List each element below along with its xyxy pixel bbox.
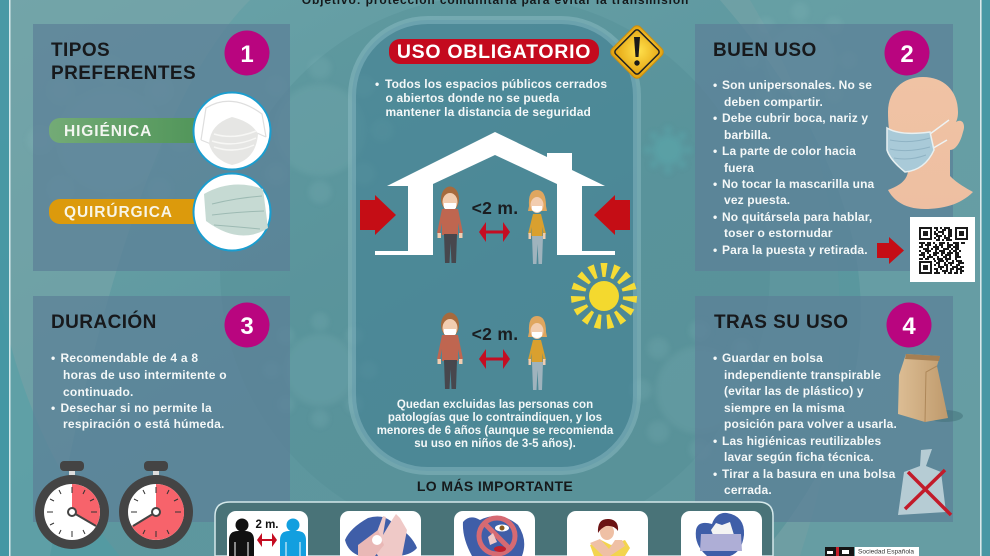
- text: after use: independiente transpirable: [724, 368, 881, 382]
- text: good use: •: [713, 144, 717, 158]
- text: good use: •: [713, 243, 717, 257]
- icon: house: [375, 132, 615, 255]
- text: good use: •: [713, 210, 717, 224]
- arrow: left: [360, 195, 396, 235]
- text: after use: Tirar a la basura en una bolsa: [722, 467, 896, 481]
- person: man indoors: [437, 186, 463, 263]
- icon: head with mask: [887, 77, 973, 209]
- text: good use: deben compartir.: [724, 95, 823, 109]
- icon: warning sign: [609, 24, 665, 80]
- panel: buen uso: [695, 24, 953, 271]
- card: distance: 2 m.: [255, 519, 279, 531]
- heading: tipos preferentes: PREFERENTES: [51, 63, 196, 84]
- text: after use: •: [713, 467, 717, 481]
- distance indoors: <2 m.: [472, 198, 518, 218]
- text: good use: No tocar la mascarilla una: [722, 177, 875, 191]
- label: higiénica: HIGIÉNICA: [64, 123, 152, 140]
- text: after use: posición para volver a usarla.: [724, 417, 897, 431]
- badge 1: [224, 30, 270, 76]
- text: good use: fuera: [724, 161, 754, 175]
- panel: tipos preferentes: [33, 24, 290, 271]
- text: good use: •: [713, 78, 717, 92]
- heading: tras su uso: TRAS SU USO: [714, 312, 848, 333]
- distance outdoors: <2 m.: [472, 324, 518, 344]
- text: public spaces: o abiertos donde no se pueda: [386, 91, 560, 105]
- heading: tipos preferentes: TIPOS: [51, 40, 110, 61]
- text: after use: Guardar en bolsa: [722, 351, 823, 365]
- text: good use: Debe cubrir boca, nariz y: [722, 111, 868, 125]
- text: after use: lavar según ficha técnica.: [724, 450, 874, 464]
- distance indoors: [472, 198, 518, 242]
- text: public spaces: •: [375, 77, 379, 91]
- text: after use: Las higiénicas reutilizables: [722, 434, 881, 448]
- duration text: •: [51, 351, 55, 365]
- text: exclusions: patologías que lo contraindiquen, y los: [388, 412, 602, 424]
- icon: surgical mask: [194, 174, 270, 250]
- label: quirúrgica: [49, 199, 209, 224]
- badge 2: [884, 30, 930, 76]
- person: woman indoors: [528, 190, 547, 264]
- text: good use: vez puesta.: [724, 193, 790, 207]
- text: after use: (evitar las de plástico) y: [724, 384, 864, 398]
- icon: sun: [571, 263, 637, 329]
- panel: lo más importante: [215, 502, 773, 556]
- duration text: continuado.: [63, 385, 134, 399]
- qr code: [910, 217, 975, 282]
- icon: plastic bag crossed: [898, 449, 951, 515]
- text: good use: Son unipersonales. No se: [722, 78, 872, 92]
- text: public spaces: Todos los espacios públicos cerrados: [385, 77, 607, 91]
- distance outdoors: [472, 324, 518, 369]
- logo: sociedad española: [825, 547, 919, 556]
- text: after use: siempre en la misma: [724, 401, 845, 415]
- text: public spaces: mantener la distancia de seguridad: [386, 105, 591, 119]
- badge 4: 4: [902, 313, 916, 340]
- person: woman outdoors: [528, 316, 547, 390]
- icon: paper bag: [898, 354, 963, 422]
- label: quirúrgica: QUIRÚRGICA: [64, 203, 173, 221]
- card: distance: [227, 511, 308, 556]
- text: after use: cerrada.: [724, 483, 772, 497]
- text: good use: •: [713, 177, 717, 191]
- arrow: to qr code: [877, 237, 904, 264]
- heading: duración: DURACIÓN: [51, 311, 157, 333]
- text: exclusions: menores de 6 años (aunque se recomienda: [377, 425, 614, 437]
- card: tissues: [681, 511, 762, 556]
- heading: uso obligatorio: USO OBLIGATORIO: [397, 41, 591, 63]
- icon: hygienic mask: [194, 92, 270, 170]
- text: after use: •: [713, 434, 717, 448]
- text: after use: •: [713, 351, 717, 365]
- text: good use: No quitársela para hablar,: [722, 210, 872, 224]
- arrow: right: [594, 195, 630, 235]
- text: good use: Para la puesta y retirada.: [722, 243, 868, 257]
- badge 3: [224, 302, 270, 348]
- icon: stopwatch 8 hours: [119, 461, 193, 549]
- duration text: Recomendable de 4 a 8: [60, 351, 198, 365]
- badge 4: [886, 302, 932, 348]
- badge 1: 1: [240, 41, 254, 68]
- icon: stopwatch 4 hours: [35, 461, 109, 549]
- card: cough into elbow: [567, 511, 648, 556]
- heading: lo más importante: LO MÁS IMPORTANTE: [417, 478, 573, 494]
- person: man outdoors: [437, 312, 463, 389]
- badge 2: 2: [900, 41, 914, 68]
- duration text: Desechar si no permite la: [60, 401, 212, 415]
- text: exclusions: Quedan excluidas las personas con: [397, 399, 593, 411]
- label: higiénica: [49, 118, 209, 143]
- duration text: •: [51, 401, 55, 415]
- text: good use: •: [713, 111, 717, 125]
- panel: uso obligatorio: [352, 20, 665, 471]
- text: exclusions: su uso en niños de 3-5 años).: [414, 438, 576, 450]
- text: good use: toser o estornudar: [724, 226, 833, 240]
- text: good use: barbilla.: [724, 128, 771, 142]
- duration text: horas de uso intermitente o: [63, 368, 227, 382]
- badge 3: 3: [240, 313, 254, 340]
- heading: buen uso: BUEN USO: [713, 40, 817, 61]
- card: do not touch face: [454, 511, 535, 556]
- logo: sociedad española: Sociedad Española: [858, 548, 914, 556]
- duration text: respiración o está húmeda.: [63, 417, 225, 431]
- card: hand washing: [340, 511, 421, 556]
- panel: tras su uso: [695, 296, 953, 522]
- panel: duración: [33, 296, 290, 522]
- text: good use: La parte de color hacia: [722, 144, 856, 158]
